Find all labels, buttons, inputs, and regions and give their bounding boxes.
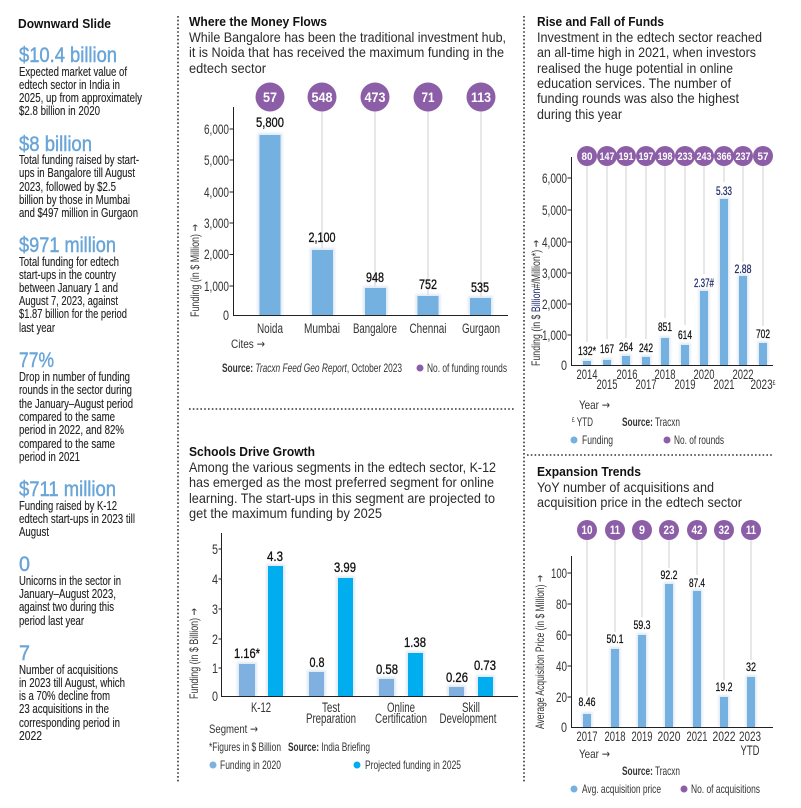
stat: $8 billion: ups in Bangalore till August [19,165,135,180]
x axis labels: Bangalore [353,321,397,336]
stat: 77%: Drop in number of funding [19,369,130,384]
stat: 7 acquisitions: in 2023 till August, which [19,675,125,690]
x axis labels: 2023 [739,729,761,744]
y axis labels [542,171,567,373]
value labels: 0.58 [376,662,398,677]
value labels: 752 [419,277,437,292]
rounds circles: 147 [600,151,614,163]
text block: intro [189,30,506,76]
stat: 77%: period in 2021 [19,449,80,464]
heading: Downward Slide: Downward Slide [18,16,111,31]
y axis labels: 6,000 [542,171,567,186]
stat: 0 unicorns: 0 [19,553,30,576]
acquisitions circles: 11 [746,525,756,537]
stat: $10.4 billion: $10.4 billion [19,44,117,67]
acquisitions circles: 9 [639,525,645,537]
stat: 0 unicorns: Unicorns in the sector in [19,573,121,588]
x axis title: Year → [579,398,610,412]
stat: $8 billion: and $497 million in Gurgaon [19,205,138,220]
value labels: 50.1 [606,634,624,646]
x axis labels: 2019 [632,729,652,744]
y axis labels: 60 [556,628,567,643]
value labels: 948 [366,270,384,285]
bars: projected funding in 2025 [268,566,493,696]
rounds circles: 198 [658,151,672,163]
stat: 77%: compared to the same [19,409,115,424]
stat: $8 billion [19,133,139,220]
stat: 77%: period in 2022, and 82% [19,422,124,437]
stat: $971 million: $971 million [19,234,116,257]
x axis labels [576,729,761,758]
value labels: 132* [578,346,596,358]
stat: $971 million: $1.87 billion for the period [19,306,127,321]
acquisitions circles: 42 [692,525,702,537]
text block: intro [537,30,762,122]
stat: $971 million: last year [19,320,55,335]
value labels: 242 [639,343,653,355]
rounds circles: 548 [312,89,333,105]
y axis labels: 6,000 [204,122,229,137]
y axis labels: 1,000 [542,328,567,343]
stat: $8 billion: billion by those in Mumbai [19,192,130,207]
legend: funding rounds: No. of funding rounds [427,361,507,375]
x axis labels: 2020 [658,729,680,744]
x axis labels: 2015 [596,377,618,392]
bar chart: funding by segment [187,533,518,772]
stat: 0 unicorns [19,553,121,628]
x axis labels: Development [440,711,497,726]
value labels: 167 [600,344,614,356]
stat: $10.4 billion: Expected market value of [19,64,127,79]
text block: intro: realised the huge potential in online [537,61,733,76]
text block: intro: Investment in the edtech sector reached [537,30,762,45]
x axis labels: £ [773,380,776,387]
value labels: 264 [619,342,633,354]
stat: $711 million: Funding raised by K-12 [19,498,117,513]
stat: $10.4 billion: $2.8 billion in 2020 [19,103,100,118]
x axis labels: 2023 [750,377,781,392]
stat: $971 million: August 7, 2023, against [19,293,118,308]
rounds circles: 191 [618,151,634,163]
acquisitions circles: 32 [718,525,730,537]
value labels: 2,100 [308,230,336,245]
value labels: 92.2 [660,570,678,582]
y axis labels: 1 [212,661,218,676]
stat: 0 unicorns: January–August 2023, [19,586,116,601]
x axis labels: 2017 [576,729,598,744]
y axis labels [212,542,218,704]
text block: intro: has emerged as the most preferred segment for online [189,475,494,490]
rounds circles: 243 [696,151,712,163]
legend [570,433,724,447]
text block: intro [537,480,742,510]
value labels: 851 [658,322,672,334]
x axis labels [576,367,776,392]
x axis labels: 2016 [616,367,638,382]
x axis labels: Certification [375,711,427,726]
value labels: 32 [746,662,756,674]
stat: 7 acquisitions: is a 70% decline from [19,688,110,703]
stat: $711 million [19,478,135,539]
stat: 77% [19,349,133,464]
text block: intro: an all-time high in 2021, when investors [537,45,756,60]
stat: 77%: rounds in the sector during [19,382,132,397]
y axis labels: 5 [212,542,218,557]
value labels: 2.88 [734,264,752,276]
x axis title: Segment → [209,722,258,736]
bars [260,135,491,315]
stat: $10.4 billion: 2025, up from approximately [19,90,142,105]
x axis labels: 2018 [654,367,676,382]
x axis labels: Online [387,700,415,715]
value labels [578,186,770,358]
x axis labels: Gurgaon [462,321,500,336]
bar chart: funding by city [188,82,508,375]
stat: $971 million: between January 1 and [19,280,118,295]
stat: $711 million: edtech start-ups in 2023 till [19,511,135,526]
x axis labels [251,700,497,726]
footnote and source: £ [572,417,575,424]
y axis labels: 2,000 [204,247,229,262]
value labels [234,549,496,685]
y axis labels: 5,000 [542,203,567,218]
legend [210,758,461,772]
acquisitions circles: 23 [664,525,674,537]
x axis labels: 2018 [604,729,626,744]
stat: $971 million [19,234,127,335]
value labels: 87.4 [689,578,705,590]
y axis labels: 0 [561,720,567,735]
legend: Projected funding in 2025 [365,758,461,772]
text block: intro: learning. The start-ups in this segment are projected to [189,491,495,506]
value labels: 0.8 [310,655,324,670]
acquisitions circles: 10 [582,525,592,537]
y axis title: Funding (in $ Billion) → [187,608,201,699]
panel: Where the Money Flows [188,14,508,375]
stat: 7 acquisitions: 23 acquisitions in the [19,701,109,716]
stat: $711 million: August [19,524,49,539]
rounds circles: 197 [638,151,654,163]
stat: 7 acquisitions: 2022 [19,728,42,743]
stat: 7 acquisitions: Number of acquisitions [19,662,118,677]
text block: intro: it is Noida that has received the maximum funding in the [189,45,504,60]
y axis labels: 0 [561,358,567,373]
acquisitions circles [577,520,761,540]
value labels [578,570,756,709]
x axis labels: Mumbai [304,321,340,336]
value labels: 702 [756,329,770,341]
value labels: 614 [678,330,692,342]
y axis labels: 2 [212,632,218,647]
legend: No. of rounds [674,433,724,447]
footnote and source: Source: India Briefing [288,740,370,754]
text block: intro: education services. The number of [537,76,731,91]
x axis labels: K-12 [251,700,271,715]
text block: intro: during this year [537,107,622,122]
rounds circles: 80 [582,151,592,163]
y axis title: Funding (in $ Million) → [188,224,202,317]
text block: intro: funding rounds was also the highest [537,91,739,106]
stat: 77%: compared to the same [19,436,115,451]
value labels: 0.26 [446,670,468,685]
stat: 0 unicorns: against two during this [19,599,114,614]
footnote and source [572,415,680,429]
rounds circles: 233 [678,151,692,163]
value labels: 4.3 [267,549,283,564]
y axis title: Funding (in $ Billion#/Million*) → [529,240,543,366]
text block: intro: acquisition price in the edtech sector [537,495,742,510]
x axis labels: Test [322,700,340,715]
stat: $10.4 billion: edtech sector in India in [19,77,120,92]
y axis labels [204,122,229,323]
stat: $711 million: $711 million [19,478,116,501]
x axis labels: 2021 [686,729,708,744]
footnote and source: YTD [575,415,593,429]
rounds circles [577,146,773,166]
legend: Funding in 2020 [220,758,281,772]
stat: 7 acquisitions [19,642,125,743]
value labels: 1.38 [404,635,426,650]
x axis labels: Skill [462,700,480,715]
x axis labels [257,321,500,336]
x axis labels: Chennai [410,321,446,336]
y axis labels: 0 [223,308,229,323]
panel: Schools Drive Growth [187,444,518,772]
y axis title: Average Acquisition Price (in $ Million) → [533,575,547,729]
legend: Avg. acquisition price [582,782,661,796]
y axis labels: 3 [212,602,218,617]
footnote and source: *Figures in $ Billion [209,740,281,754]
x axis labels: 2021 [714,377,734,392]
x axis labels: Preparation [306,711,356,726]
rounds circles: 57 [758,151,768,163]
bars [583,584,755,727]
value labels: 2.37# [694,278,714,290]
bar chart: acquisitions by year [533,520,773,796]
stat: $10.4 billion [19,44,142,118]
y axis labels: 2,000 [542,297,567,312]
panel: Downward Slide key figures [18,16,142,743]
legend [570,782,760,796]
y axis labels [551,566,567,735]
y axis labels: 40 [556,659,567,674]
y axis labels: 3,000 [204,216,229,231]
heading: Where the Money Flows: Where the Money Flows [189,14,327,29]
y axis labels: 80 [556,597,567,612]
y axis labels: 4,000 [204,185,229,200]
footnote and source: Source: Tracxn [622,415,680,429]
value labels: 535 [471,280,489,295]
value labels: 19.2 [716,682,732,694]
value labels: 0.73 [474,658,496,673]
source: Source: Tracxn Feed Geo Report, October 2023 [222,361,402,375]
rounds circles: 473 [364,89,386,105]
heading: Expansion Trends: Expansion Trends [537,464,641,479]
rounds circles: 113 [471,89,491,105]
value labels: 59.3 [634,620,650,632]
x axis labels: 2022 [732,367,754,382]
value labels: 5,800 [256,115,284,130]
rounds circles: 71 [422,89,435,105]
panel: Expansion Trends [533,464,773,796]
x axis labels: 2020 [694,367,714,382]
y axis labels: 20 [556,690,567,705]
stat: 7 acquisitions: corresponding period in [19,715,120,730]
x axis labels: 2014 [576,367,598,382]
source: Source: Tracxn [622,764,680,778]
heading: Schools Drive Growth: Schools Drive Growth [189,444,315,459]
legend: No. of acquisitions [691,782,760,796]
value labels: 8.46 [578,697,596,709]
value labels: 3.99 [334,560,356,575]
stat: $8 billion: 2023, followed by $2.5 [19,179,116,194]
x axis labels: Noida [257,321,283,336]
panel: Rise and Fall of Funds [529,14,776,447]
y axis labels: 3,000 [542,266,567,281]
heading: Rise and Fall of Funds: Rise and Fall of Funds [537,14,664,29]
y axis labels: 4,000 [542,235,567,250]
text block: intro [189,460,496,521]
acquisitions circles: 11 [610,525,620,537]
x axis labels: 2019 [674,377,696,392]
legend: funding rounds [416,361,507,375]
legend: Funding [582,433,613,447]
text block: intro: YoY number of acquisitions and [537,480,714,495]
text block: intro: While Bangalore has been the traditional investment hub, [189,30,506,45]
value labels [256,115,489,295]
text block: intro: get the maximum funding by 2025 [189,506,382,521]
y axis labels: 5,000 [204,153,229,168]
x axis labels: 2022 [712,729,736,744]
text block: intro: Among the various segments in the edtech sector, K-12 [189,460,496,475]
footnote and source [209,740,370,754]
text block: intro: edtech sector [189,61,266,76]
bars: funding in 2020 [239,664,464,696]
x axis title: Year → [579,747,610,761]
y axis labels: 0 [212,689,218,704]
x axis title: Cites → [231,337,265,351]
x axis labels: YTD [740,743,760,758]
stat: $971 million: Total funding for edtech [19,254,119,269]
value labels: 5.33 [716,186,732,198]
x axis labels: 2017 [636,377,656,392]
y axis labels: 1,000 [204,279,229,294]
stat: $971 million: start-ups in the country [19,267,116,282]
stat: 7 acquisitions: 7 [19,642,30,665]
stat: 77%: the January–August period [19,396,133,411]
stat: $8 billion: $8 billion [19,133,92,156]
y axis labels: 4 [212,572,218,587]
stat: $8 billion: Total funding raised by start- [19,152,139,167]
value labels: 1.16* [234,646,261,661]
bars [583,199,767,365]
bar chart: funding by year [529,146,776,447]
stat: 77%: 77% [19,349,54,372]
stat: 0 unicorns: period last year [19,613,84,628]
rounds circles: 237 [736,151,750,163]
rounds circles: 57 [263,89,277,105]
rounds circles: 366 [716,151,732,163]
rounds circles [256,82,496,112]
y axis labels: 100 [551,566,567,581]
